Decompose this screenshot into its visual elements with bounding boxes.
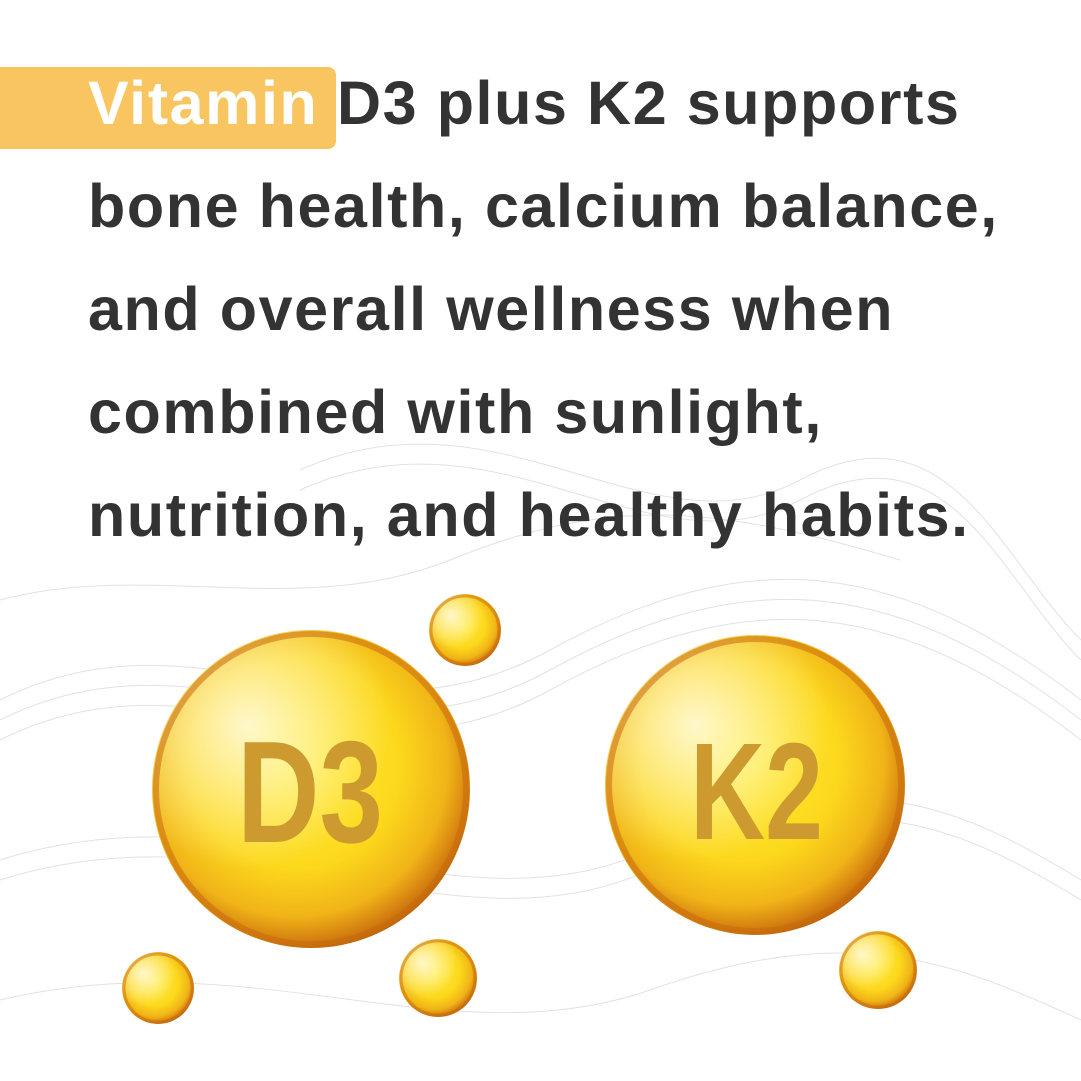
headline text <box>88 69 999 549</box>
headline text: and overall wellness when <box>88 275 894 343</box>
headline text: combined with sunlight, <box>88 378 823 446</box>
capsule: D3 <box>152 630 470 948</box>
capsule: K2 <box>605 635 905 935</box>
capsule: D3: D3 <box>237 711 383 873</box>
highlight box <box>0 67 336 149</box>
capsule: K2: K2 <box>690 715 823 869</box>
headline text: Vitamin D3 plus K2 supports <box>88 69 961 137</box>
headline text: bone health, calcium balance, <box>88 172 999 240</box>
small capsules <box>122 594 917 1024</box>
headline text: nutrition, and healthy habits. <box>88 481 970 549</box>
